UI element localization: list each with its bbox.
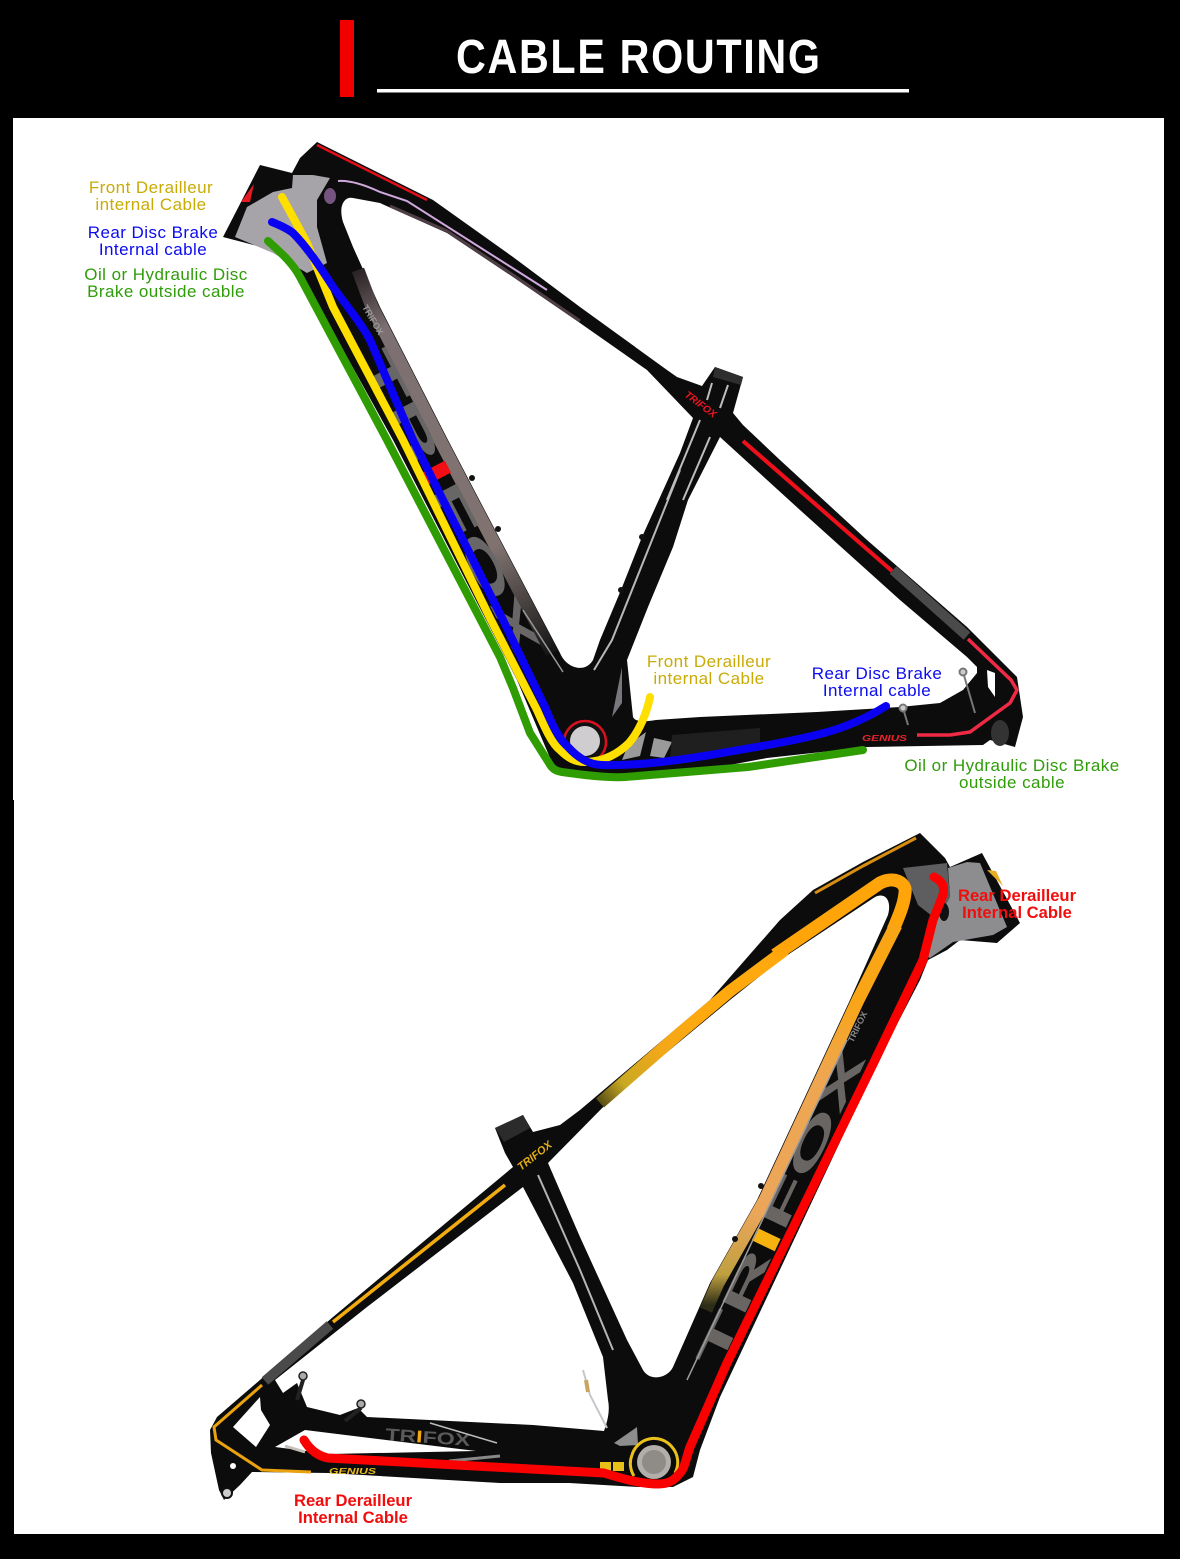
seat cluster logo: TRIFOX [682,390,719,421]
orange top tube stripe [815,838,916,893]
genius mark: GENIUS [329,1467,377,1476]
label: rear derailleur chainstay: Rear Derailleur [294,1491,413,1510]
red cable [304,877,944,1484]
small grey logo: TRIFOX [846,1010,869,1044]
green cable [268,241,863,777]
seat tube lower sheen [612,667,622,717]
label: hydraulic brake line 2: Brake outside cable [87,282,245,301]
seat collar [713,367,743,385]
down tube tan sheen [358,270,552,653]
red accent bar [340,20,354,97]
genius mark: GENIUS [862,734,908,743]
label: rear derailleur head tube: Rear Derailleur [958,886,1077,905]
carbon frame body [210,833,1020,1500]
stay cable [430,1423,497,1443]
dark grey head patch [903,863,950,920]
down tube logo: TRIFOX [688,1044,874,1373]
down tube bolts [469,475,645,593]
stay logo: TR IFOX [385,1425,472,1450]
label: hydraulic brake chainstay: Oil or Hydraulic Disc Brake [904,756,1120,775]
label: rear disc brake chainstay: Rear Disc Brake [812,664,942,683]
seat tube highlight [538,1175,613,1350]
red top tube stripe [317,145,427,200]
header: cable routing title [340,20,909,97]
brake mount bolts [297,1372,365,1421]
orange inner edge top tube [600,950,785,1103]
small grey logo: TRIFOX [360,303,385,337]
seat cluster highlights [667,383,728,500]
carbon frame body [223,142,1023,776]
label: front derailleur bottom bracket: Front Derailleur [647,652,771,671]
frame: bottom view with cable [210,833,1020,1500]
red head accent [241,184,254,202]
orange inner edge down tube [706,925,896,1310]
rear dropout [991,720,1009,746]
tan cable ferrule [586,1380,588,1392]
grey head tube patch [235,175,330,273]
down tube logo: TR IFOX [353,342,548,664]
bottom bracket shell [630,1438,678,1486]
label: front derailleur top-left: Front Derailleur [89,178,213,197]
brake mount bolts [900,668,975,725]
label: front derailleur bottom bracket line 2: internal Cable [653,669,765,688]
title: CABLE ROUTING [456,30,822,84]
carbon chainstay texture [670,728,760,760]
label: rear disc brake line 2: Internal cable [99,240,207,259]
label: hydraulic brake top-left: Oil or Hydraulic Disc [84,265,248,284]
grey window marks [622,732,672,760]
pink top tube highlight [338,181,547,290]
panel: lower white background [14,800,1164,1534]
orange head accent [987,870,1003,886]
red seat stay stripe [743,441,892,571]
grey head tube patch [920,862,1007,958]
chainstay pattern [449,1456,500,1461]
down tube bolts [732,1183,764,1242]
seat collar [495,1115,530,1142]
orange chainstay stripe [214,1385,311,1472]
label: rear disc brake top-left: Rear Disc Brake [88,223,218,242]
frame: top view with cables [223,142,1023,777]
grey cable stub [583,1370,607,1428]
grey window patch [614,1427,638,1446]
label: rear derailleur chainstay line 2: Internal Cable [298,1508,408,1527]
seat tube highlight [594,470,680,670]
grey seat stay logo [265,1325,330,1381]
purple joint [324,188,336,204]
seat tube logo: TRIFOX [515,1139,555,1173]
brown top tube underside [390,206,580,321]
head notch [939,903,949,921]
label: front derailleur line 2: internal Cable [95,195,207,214]
grey seat stay logo [893,570,967,636]
label: rear derailleur head tube line 2: Internal Cable [962,903,1072,922]
blue cable [272,222,886,765]
down tube highlight [523,610,563,672]
rear dropout details [222,1463,236,1498]
orange seat stay stripe [333,1185,505,1322]
label: rear disc brake chainstay line 2: Internal cable [823,681,931,700]
panel: upper white background [13,118,1164,800]
label: hydraulic brake chainstay line 2: outside cable [959,773,1065,792]
BB68 badges [600,1462,624,1471]
yellow cable [282,197,650,762]
grey logo stripe [687,1040,847,1380]
red chainstay stripe [917,639,1017,735]
rear cable stub [285,1446,305,1452]
orange inner edge apex [775,880,905,955]
bottom bracket shell [564,721,606,763]
title underline [377,89,909,92]
